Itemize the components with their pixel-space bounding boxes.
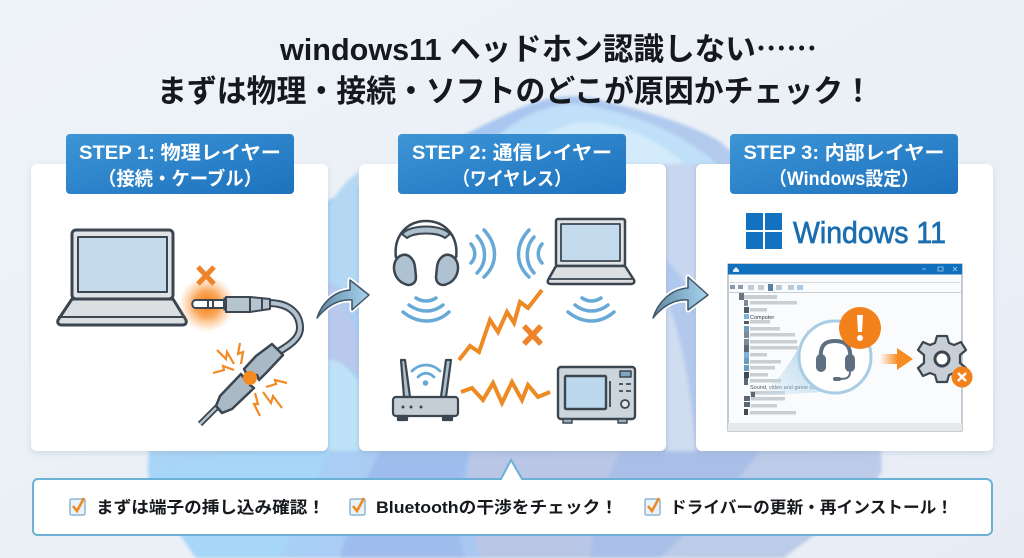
icon: orange glow and cross [179,267,235,332]
icon: headset in circle [799,321,871,393]
icon: interference zigzag [459,290,550,403]
step 1 badge: （接続・ケーブル） [98,167,262,190]
step 3 badge: STEP 3: 内部レイヤー [744,142,944,164]
panel: step 1 physical layer [31,134,328,451]
device tree [739,293,798,415]
icon: microwave [558,367,635,423]
step 2 badge: STEP 2: 通信レイヤー [412,142,612,164]
step 2 badge [398,134,626,194]
icon: sparks [213,343,287,416]
icon: gear with error [918,336,972,388]
icon: cross [524,326,541,344]
device manager window: Computer [750,315,774,321]
step 3 badge [730,134,958,194]
icon: router [393,360,458,420]
windows 11 logo: Windows 11 [793,215,946,250]
highlight beam [760,330,822,396]
title: windows11 ヘッドホン認識しない…… [279,24,817,69]
panel: step 3 internal layer [696,134,993,451]
device manager window [728,264,962,431]
icon: audio jack and cable [192,297,300,352]
icon: wifi [412,365,440,384]
panel: step 2 wireless layer [359,134,666,451]
icon: broken cable [200,344,283,424]
arrow: to settings [880,348,913,370]
callout: checklist [33,460,992,535]
check item 2: Bluetoothの干渉をチェック！ [376,498,618,517]
icon: laptop [548,219,634,284]
title: まずは物理・接続・ソフトのどこが原因かチェック！ [157,74,873,109]
step 3 badge: （Windows設定） [769,168,919,190]
icon: headphones [394,221,458,285]
step 2 badge: （ワイヤレス） [453,168,571,190]
step 1 badge: STEP 1: 物理レイヤー [79,142,281,164]
check item 1: まずは端子の挿し込み確認！ [96,498,325,517]
title [157,24,873,109]
arrow: step 1 to step 2 [317,280,369,318]
icon: signal waves from laptop [518,230,614,321]
icon: signal waves from headphones [403,230,494,321]
check item 3: ドライバーの更新・再インストール！ [670,498,953,517]
toolbar icons [730,284,803,291]
icon: warning badge [839,307,881,349]
windows 11 logo [746,213,946,250]
icon: laptop [58,230,186,325]
step 1 badge [66,134,294,194]
device manager window: Sound, video and game controllers [750,385,835,391]
arrow: step 2 to step 3 [653,277,708,318]
